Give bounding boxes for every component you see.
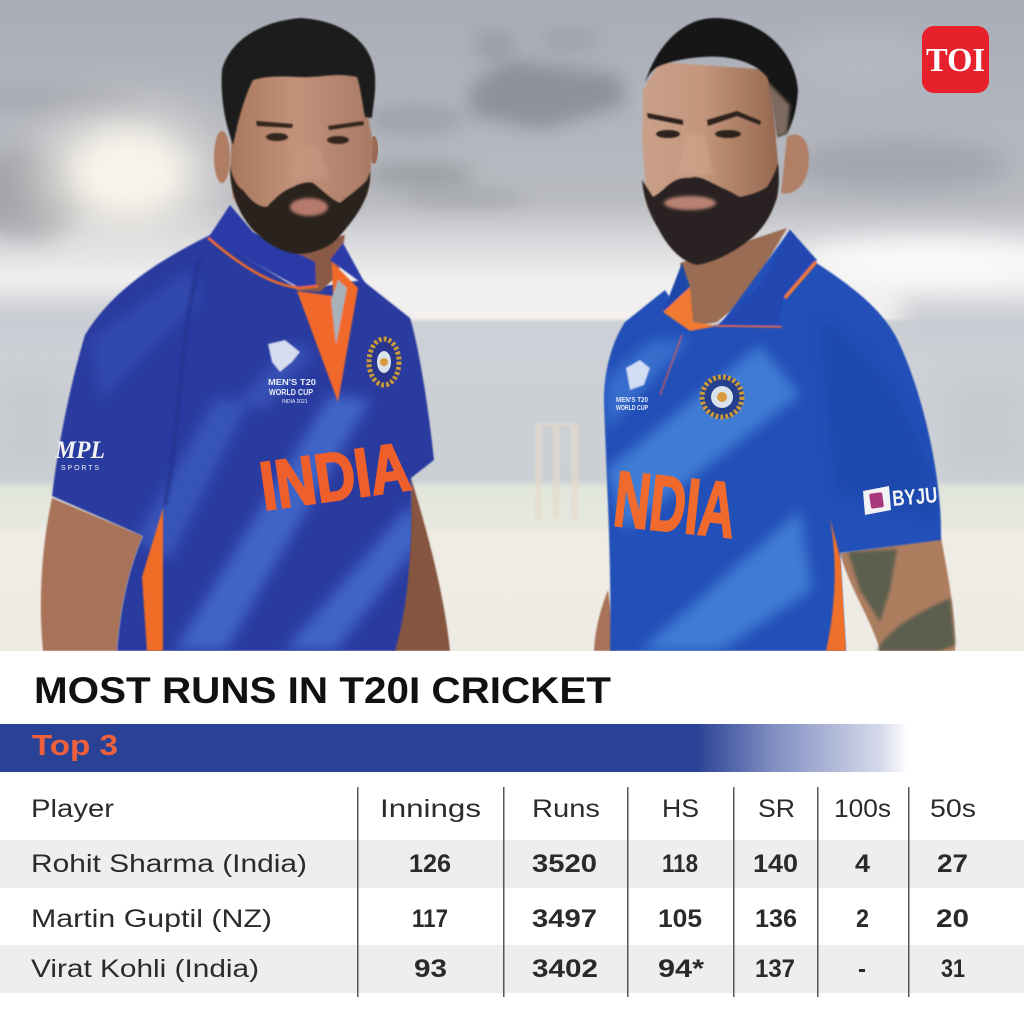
hair xyxy=(222,18,375,145)
head xyxy=(214,18,378,254)
header row: 50s xyxy=(930,795,976,823)
sleeve sponsor: BYJU'S xyxy=(863,486,936,515)
world cup logo: WORLD CUP xyxy=(269,388,314,397)
row: Virat Kohli: 94* xyxy=(658,955,704,983)
lips xyxy=(664,196,716,210)
collar and placket xyxy=(208,205,367,402)
row: Virat Kohli: Virat Kohli (India) xyxy=(31,955,259,983)
row: Virat Kohli: - xyxy=(858,955,866,983)
row: Rohit Sharma: 4 xyxy=(855,850,870,878)
lips xyxy=(290,198,328,216)
crest xyxy=(700,375,744,419)
collar xyxy=(660,230,817,395)
row: Martin Guptil: 105 xyxy=(658,905,702,933)
crest xyxy=(367,336,401,388)
arms xyxy=(41,478,450,651)
subtitle bar: Top 3 xyxy=(0,724,908,772)
row: Rohit Sharma xyxy=(31,850,968,878)
TOI logo xyxy=(922,26,989,93)
row: Virat Kohli xyxy=(31,955,965,983)
row: Martin Guptil: 2 xyxy=(856,905,869,933)
sleeve sponsor: BYJU'S: BYJU xyxy=(891,482,938,511)
header row: 100s xyxy=(834,795,891,823)
row: Rohit Sharma: 27 xyxy=(937,850,968,878)
jersey text: NDIA: NDIA xyxy=(610,454,740,555)
world cup logo: INDIA 2021 xyxy=(282,399,308,405)
row: Virat Kohli: 31 xyxy=(941,955,965,983)
world cup logo xyxy=(268,340,317,405)
cricket wickets xyxy=(535,423,578,519)
header row: Player xyxy=(31,795,114,823)
jersey xyxy=(52,235,434,651)
header row: Innings xyxy=(380,795,481,823)
sleeve sponsor: MPL xyxy=(54,442,104,470)
world cup logo: WORLD CUP xyxy=(616,405,648,412)
row: Martin Guptil: Martin Guptil (NZ) xyxy=(31,905,272,933)
row: Rohit Sharma: 140 xyxy=(753,850,798,878)
eyes and brows xyxy=(256,121,364,144)
player: Virat Kohli xyxy=(594,18,955,651)
row: Virat Kohli: 93 xyxy=(414,955,447,983)
table: top 3 run scorers xyxy=(0,787,1024,997)
row shading xyxy=(0,840,1024,993)
hair xyxy=(645,18,798,137)
header row: Runs xyxy=(532,795,600,823)
title: MOST RUNS IN T20I CRICKET xyxy=(34,670,611,711)
neck xyxy=(680,228,787,327)
beard xyxy=(642,163,779,265)
header row: HS xyxy=(662,795,699,823)
beard xyxy=(230,165,370,254)
sleeve sponsor: MPL: SPORTS xyxy=(61,465,99,472)
header row xyxy=(31,795,976,823)
row: Martin Guptil: 20 xyxy=(936,905,969,933)
jersey diagonal pattern xyxy=(606,320,940,651)
TOI logo: TOI xyxy=(926,42,985,79)
head xyxy=(642,18,809,265)
row: Rohit Sharma: 3520 xyxy=(532,850,597,878)
column dividers xyxy=(357,787,910,997)
row: Rohit Sharma: 126 xyxy=(409,850,451,878)
jersey text: INDIA: INDIA xyxy=(256,429,415,525)
tattoo xyxy=(848,549,955,651)
row: Virat Kohli: 137 xyxy=(755,955,795,983)
row: Rohit Sharma: Rohit Sharma (India) xyxy=(31,850,307,878)
subtitle bar: Top 3: Top 3 xyxy=(32,730,118,762)
player: Rohit Sharma xyxy=(41,18,450,651)
world cup logo: MEN'S T20 xyxy=(268,378,317,387)
world cup logo: MEN'S T20 xyxy=(616,397,648,404)
jersey xyxy=(604,230,941,651)
jersey diagonal pattern xyxy=(90,270,425,651)
sleeve seam xyxy=(165,260,200,505)
row: Rohit Sharma: 118 xyxy=(662,850,698,878)
row: Martin Guptil: 136 xyxy=(755,905,797,933)
header row: SR xyxy=(758,795,795,823)
world cup logo xyxy=(616,360,650,412)
photo background: stadium and sky xyxy=(0,0,1024,651)
row: Martin Guptil: 117 xyxy=(412,905,448,933)
eyes and brows xyxy=(647,111,761,138)
hair fade xyxy=(768,82,790,137)
row: Martin Guptil: 3497 xyxy=(532,905,597,933)
sleeve sponsor: MPL: MPL xyxy=(54,437,105,464)
row: Virat Kohli: 3402 xyxy=(532,955,598,983)
arms xyxy=(594,538,955,651)
row: Martin Guptil xyxy=(31,905,969,933)
